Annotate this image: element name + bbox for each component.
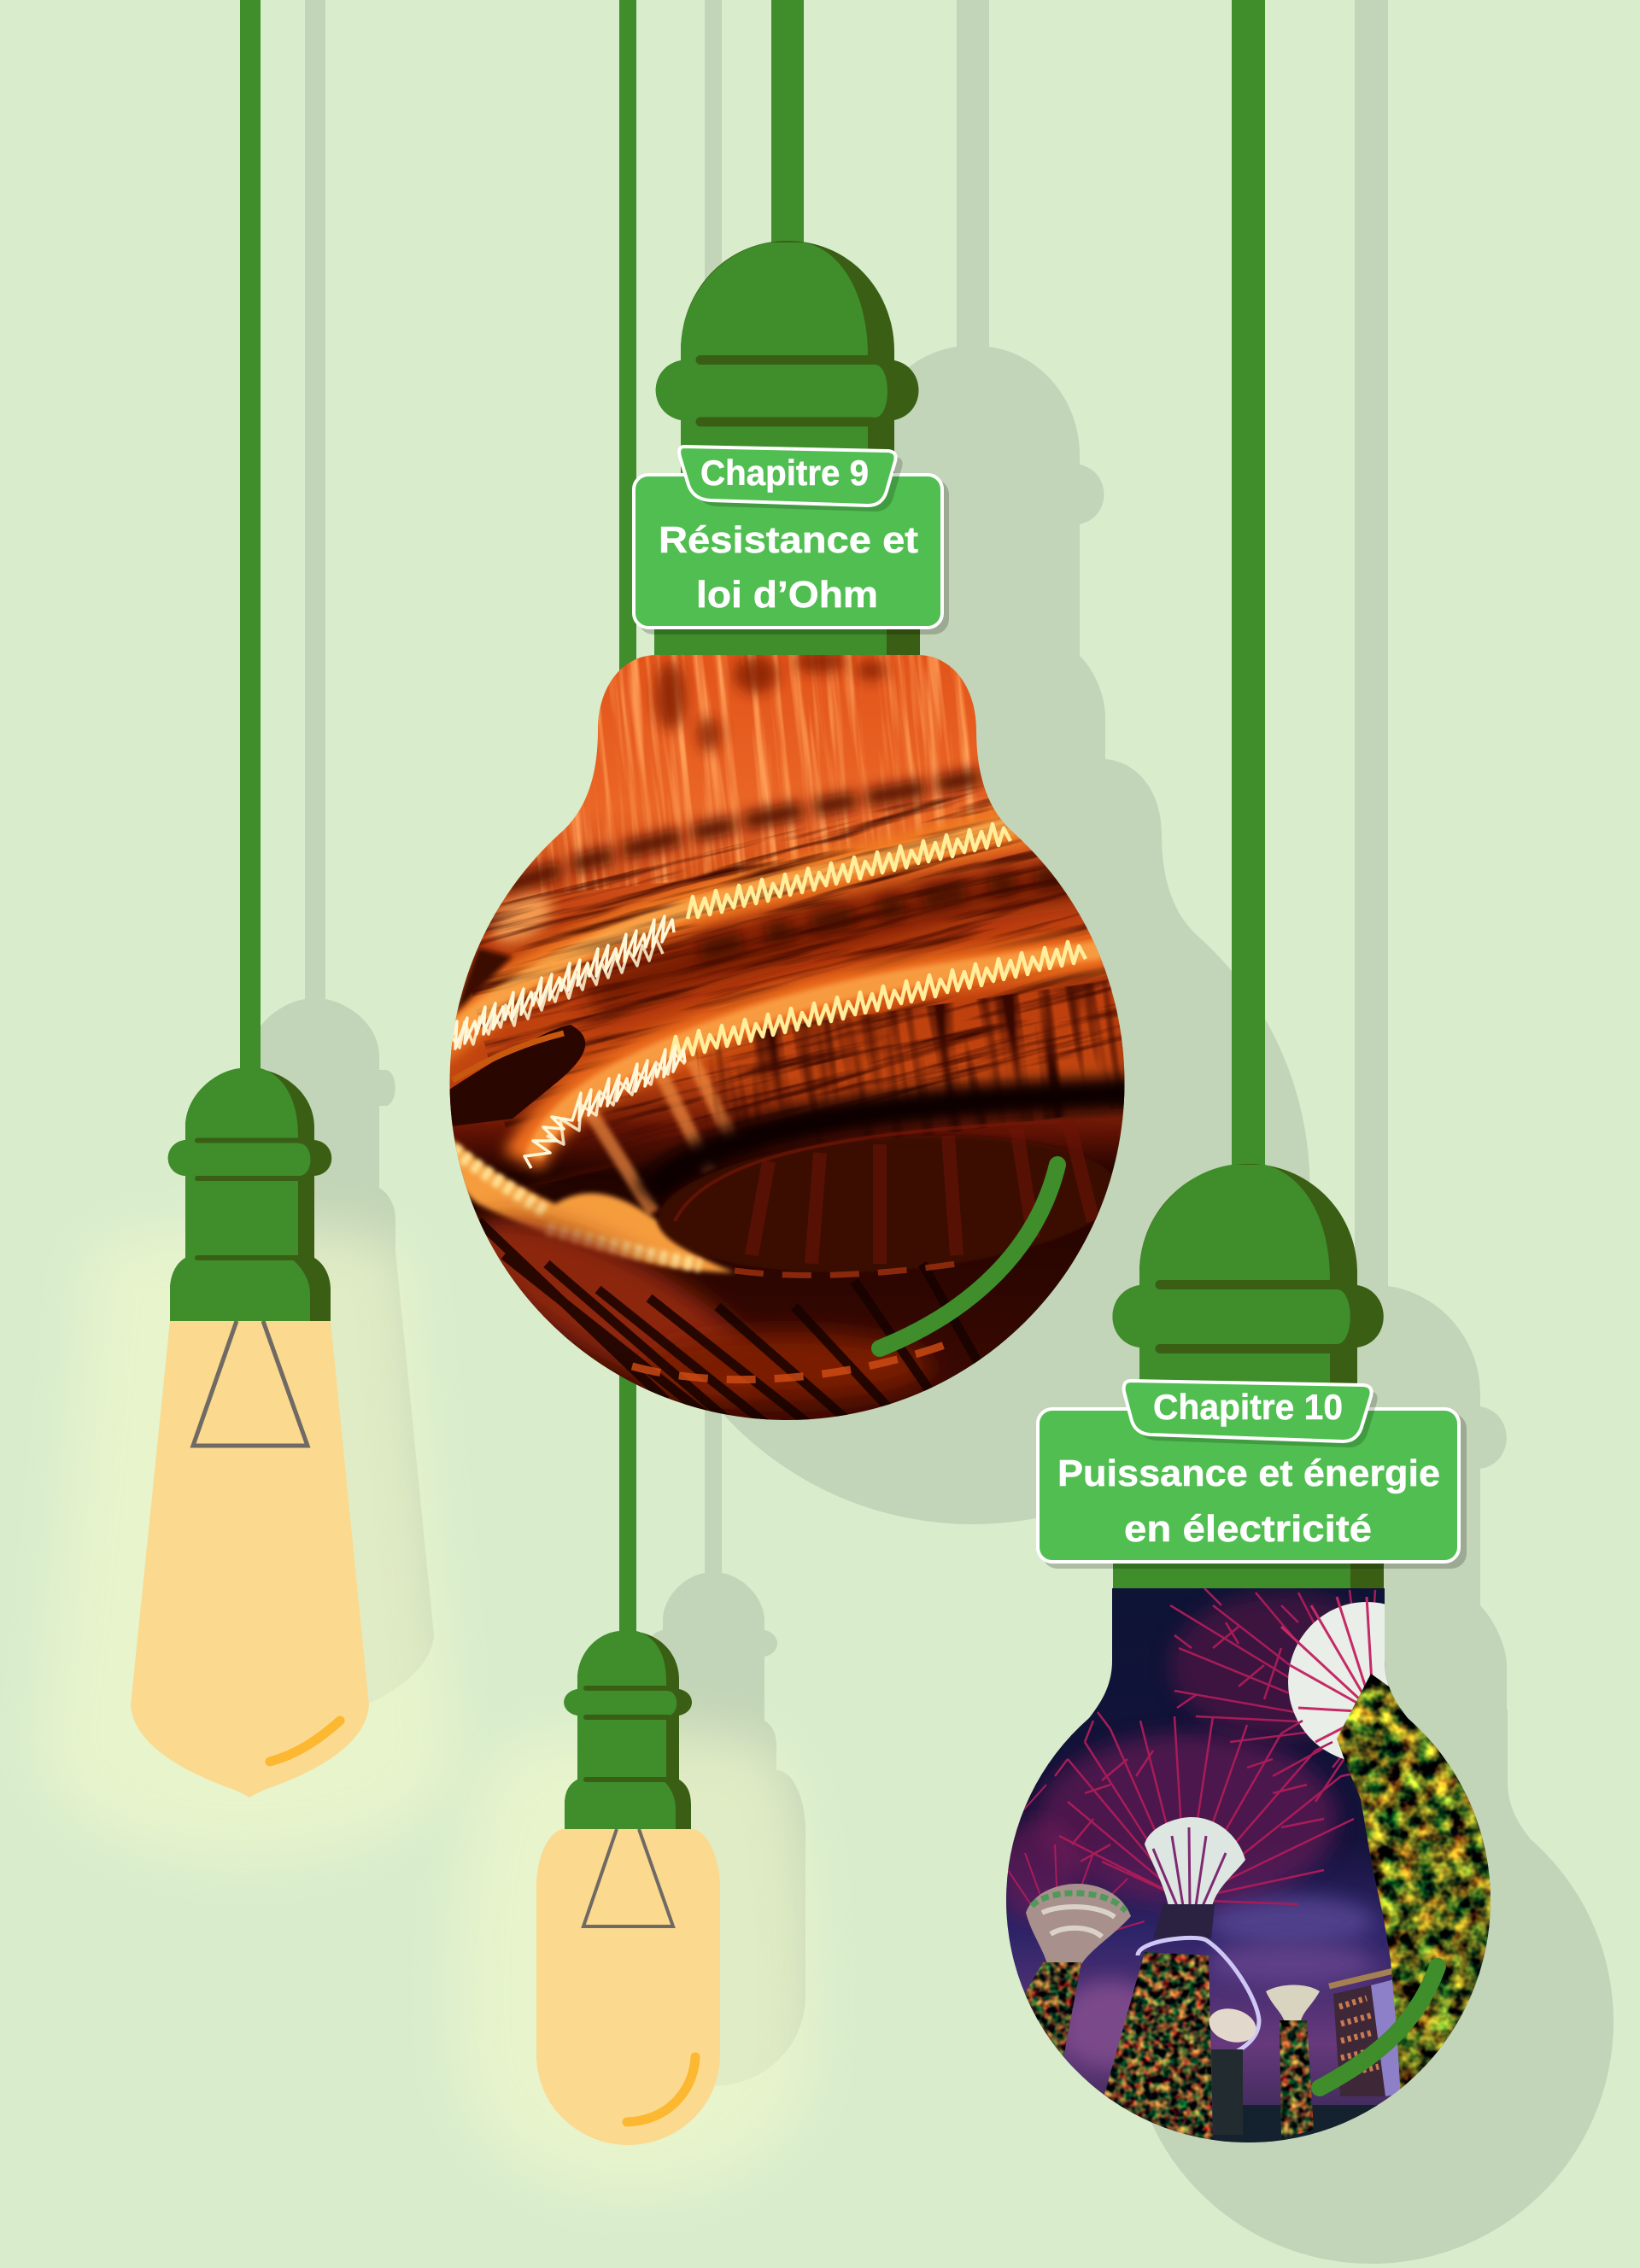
shadow: chapter 10 bulb <box>1129 0 1614 2264</box>
highlight: chapter 10 bulb <box>1320 1967 1438 2088</box>
cord: middle bulb <box>619 0 636 1633</box>
glow under filament two <box>523 950 1110 1161</box>
tab shadow <box>1130 1387 1378 1447</box>
faint vertical ribs in dark bowl <box>752 1119 1093 1264</box>
left trunk <box>1012 1962 1081 2058</box>
pink canopy haze <box>1038 1733 1337 1904</box>
central neck <box>1153 1904 1215 1938</box>
filament one: tangled coil <box>446 916 674 1049</box>
filament two: tangled coil <box>524 1046 685 1168</box>
filament: left bulb <box>193 1321 308 1446</box>
dark band two <box>589 875 1136 999</box>
glow under filament one <box>431 824 1025 1046</box>
glass: middle bulb <box>536 1829 720 2145</box>
socket: chapter 10 bulb <box>1112 1164 1384 1589</box>
socket: chapter 9 bulb <box>654 241 920 655</box>
light ribs below filament two <box>589 1059 735 1213</box>
shadow: middle bulb <box>622 0 805 2086</box>
title text line 2: loi d’Ohm <box>696 574 878 616</box>
socket: left bulb <box>168 1068 331 1321</box>
upper left light <box>484 885 559 950</box>
chapter 9 bulb <box>427 241 1186 1435</box>
shadow: chapter 9 bulb <box>636 0 1310 1524</box>
middle bulb <box>536 1631 720 2145</box>
photo bulb: glowing filaments <box>449 655 1124 1420</box>
large foliage trunk <box>1337 1674 1503 2101</box>
small dome <box>1205 2003 1260 2048</box>
dark hole <box>444 1025 585 1127</box>
title text line 2: en électricité <box>1124 1508 1372 1550</box>
left canopy branches <box>1004 1759 1145 1947</box>
light ribs <box>537 655 1026 896</box>
tab: chapter 9 <box>679 447 896 506</box>
title text line 1: Résistance et <box>659 519 918 561</box>
filament one glow core <box>448 824 1016 1038</box>
glass: left bulb <box>131 1321 369 1797</box>
black arc <box>649 1093 1145 1195</box>
top blotches <box>655 650 887 751</box>
bay sands hotel <box>1333 1985 1385 2096</box>
photo bulb: illuminated supertrees <box>995 1580 1503 2152</box>
glow: left bulb <box>38 1225 457 1862</box>
label: chapter 10 <box>1038 1381 1467 1569</box>
highlight: middle bulb <box>627 2057 695 2122</box>
left canopy <box>1026 1884 1131 1964</box>
filament one: zigzag coil <box>688 824 1010 919</box>
white canopy disc <box>1288 1602 1445 1762</box>
small tree <box>1266 1984 1320 2024</box>
tab text: Chapitre 10 <box>1153 1387 1343 1427</box>
highlight: chapter 9 bulb <box>880 1165 1057 1348</box>
shadow: left bulb <box>196 0 434 1727</box>
cord: left bulb <box>240 0 261 1071</box>
panel: chapter 10 title <box>1038 1409 1459 1562</box>
panel shadow <box>638 479 949 634</box>
socket: middle bulb <box>564 1631 692 1829</box>
diagonal lower stripes <box>478 1221 999 1426</box>
panel: chapter 9 title <box>634 475 942 628</box>
central trunk <box>1104 1952 1213 2143</box>
panel shadow <box>1042 1413 1467 1569</box>
filament two glow core <box>534 950 1102 1157</box>
central canopy dome <box>1145 1817 1245 1906</box>
upper canopy branches <box>1170 1588 1375 1802</box>
chapter 10 bulb <box>995 1164 1503 2152</box>
tab shadow <box>686 453 903 511</box>
dark band one <box>504 773 999 888</box>
filament: middle bulb <box>583 1829 673 1926</box>
bright lower left <box>444 1131 735 1272</box>
cord: chapter 9 bulb <box>771 0 804 244</box>
tab text: Chapitre 9 <box>700 453 869 493</box>
label: chapter 9 <box>634 447 949 634</box>
small distant trunk <box>1211 2049 1243 2135</box>
central canopy branches <box>1055 1712 1362 1904</box>
sky clouds <box>1204 1896 1375 1947</box>
city base <box>1213 2105 1418 2152</box>
cord: chapter 10 bulb <box>1232 0 1265 1166</box>
sky ring walkway <box>1138 1938 1259 2061</box>
filament two: zigzag coil <box>671 942 1086 1059</box>
lower left warm area <box>448 1185 782 1428</box>
highlight: left bulb <box>270 1721 340 1762</box>
fine streaks on bands <box>472 786 1122 1190</box>
glow: middle bulb <box>454 1730 812 2195</box>
left bulb <box>131 1068 369 1797</box>
title text line 1: Puissance et énergie <box>1057 1453 1440 1494</box>
tab: chapter 10 <box>1124 1381 1372 1441</box>
